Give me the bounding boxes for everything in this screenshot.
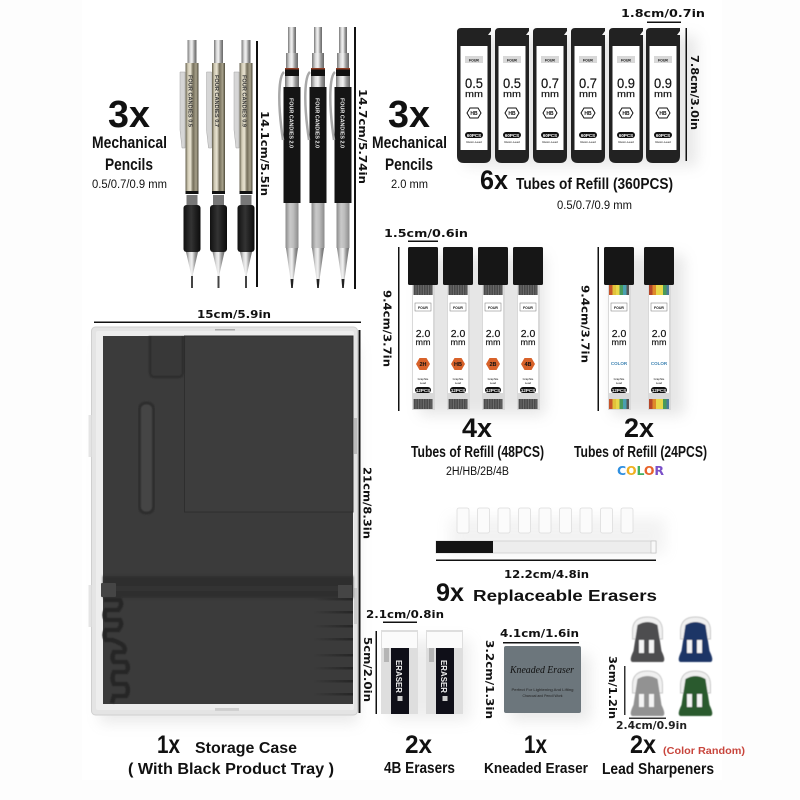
tube 2H: 2H <box>419 362 427 368</box>
sharpener navy <box>679 617 712 662</box>
tube 4B <box>513 247 543 410</box>
pencil 2: FOUR CANDIES 2.0 <box>314 98 320 148</box>
heading: 3x mechanical pencils 2.0 <box>372 94 447 191</box>
tube 4B: Lead <box>525 381 532 385</box>
tube 4B: FOUR <box>523 306 533 310</box>
pencil 2: FOUR CANDIES 0.7 <box>213 75 219 127</box>
colour tube 1: Lead <box>616 381 623 385</box>
dimension: kneaded eraser width: 4.1cm/1.6in <box>500 627 579 640</box>
heading: 2x tubes of refill colour: Tubes of Refill (24PCS) <box>574 444 707 461</box>
color random note: (Color Random) <box>663 745 745 757</box>
tube 0.9 <box>609 28 643 163</box>
heading: 3x mechanical pencils 2.0: 3x <box>388 94 430 136</box>
sharpener dark grey <box>631 617 664 662</box>
dimension: sharpener height <box>606 656 626 719</box>
tube 4B: mm <box>520 338 536 347</box>
heading: 6x tubes of refill <box>480 165 673 212</box>
tube 0.9: 60PCS <box>619 133 633 138</box>
tray recess square <box>150 336 183 377</box>
heading: replaceable erasers: Replaceable Erasers <box>473 588 657 605</box>
tube 0.7: FOUR <box>545 58 555 62</box>
heading: 4B erasers <box>384 731 455 777</box>
tube 2B: FOUR <box>488 306 498 310</box>
pencil 1: FOUR CANDIES 2.0 <box>288 98 294 148</box>
tube 4B: 12PCS <box>521 388 535 393</box>
tube HB: Graphite <box>453 377 464 381</box>
eraser holder tube <box>436 541 656 553</box>
tube 0.7 second: HB <box>584 111 592 117</box>
pencil 3 <box>234 40 254 288</box>
tube 2H: Lead <box>420 381 427 385</box>
heading: lead sharpeners <box>602 731 745 778</box>
tube 0.5 <box>457 28 491 163</box>
tray recess large <box>184 336 353 512</box>
tube 0.9: HB <box>622 111 630 117</box>
refill tubes: two colour tubes <box>604 247 684 415</box>
white eraser refills <box>457 508 633 533</box>
tube 2H: Graphite <box>418 377 429 381</box>
dimension: case height: 21cm/8.3in <box>360 467 374 539</box>
tube 2B: 2B <box>489 362 497 368</box>
pencil 3 <box>330 27 352 288</box>
tube 0.5 second: 0.5 <box>503 76 521 91</box>
tube 0.5: 0.5 <box>465 76 483 91</box>
gold mechanical pencils <box>180 40 254 288</box>
stripes top <box>609 285 629 295</box>
tube 2B: Graphite <box>488 377 499 381</box>
tube 0.7 second: mm <box>579 89 597 99</box>
heading: storage case: 1x <box>157 731 180 759</box>
wave grooves left <box>104 600 128 703</box>
tube 0.7 second <box>571 28 605 163</box>
kneaded eraser card: Charcoal and Pencil Work <box>522 694 563 698</box>
dimension: sharpener height: 3cm/1.2in <box>606 656 619 719</box>
colour tube 1: 2.0 <box>612 328 626 340</box>
tube 0.9 second: Resin-Lead <box>655 140 671 144</box>
heading: 4x tubes of refill: Tubes of Refill (48PCS) <box>411 444 544 461</box>
tube 0.7 <box>533 28 567 163</box>
refill tubes: six black tubes <box>457 28 697 166</box>
tube 2B: mm <box>486 338 501 347</box>
colour tube 2 <box>644 247 674 410</box>
heading: 4B erasers: 4B Erasers <box>384 760 455 777</box>
tube 0.7 second: 60PCS <box>581 133 595 138</box>
colour tube 2: 2.0 <box>652 328 666 340</box>
heading: 4x tubes of refill <box>411 413 544 478</box>
tube 0.9: FOUR <box>621 58 631 62</box>
tube 0.5: mm <box>465 89 483 99</box>
4B erasers <box>381 630 470 720</box>
tube 0.5 second: Resin-Lead <box>504 140 520 144</box>
colour tube 2: mm <box>652 338 667 347</box>
stripes bottom <box>609 399 629 409</box>
tube 2H: 2.0 <box>416 328 430 340</box>
heading: 4x tubes of refill: 2H/HB/2B/4B <box>446 466 509 478</box>
heading: 3x mechanical pencils 2.0: Mechanical <box>372 133 447 152</box>
heading: 4B erasers: 2x <box>405 731 432 759</box>
heading: 2x tubes of refill colour <box>574 413 707 478</box>
heading: 6x tubes of refill: Tubes of Refill (360PCS) <box>516 176 673 193</box>
colour tube 1: Graphite <box>614 377 625 381</box>
tube HB: HB <box>454 362 462 368</box>
pencil 3: FOUR CANDIES 0.9 <box>240 75 246 127</box>
heading: kneaded eraser: 1x <box>524 731 547 759</box>
tube HB: mm <box>450 338 466 347</box>
tube HB: 2.0 <box>451 328 465 340</box>
kneaded eraser card: Perfect For Lightening And Lifting <box>512 688 574 692</box>
tube 0.9: mm <box>617 89 635 99</box>
refill tubes: four graphite tubes <box>408 247 545 415</box>
kneaded eraser card <box>504 646 590 721</box>
sharpener green <box>679 671 712 716</box>
heading: lead sharpeners: 2x <box>630 731 656 759</box>
tube 0.9 second: HB <box>659 111 667 117</box>
tube 2H: FOUR <box>418 306 428 310</box>
grooves right <box>313 598 353 696</box>
tube 0.9 second: FOUR <box>658 58 668 62</box>
heading: storage case: Storage Case <box>195 740 297 757</box>
heading: replaceable erasers <box>436 579 657 607</box>
tube HB: Lead <box>455 381 462 385</box>
heading: storage case <box>128 731 334 778</box>
tube 2B <box>478 247 508 410</box>
stripes top <box>649 285 669 295</box>
dimension: black pencil length: 14.7cm/5.74in <box>356 89 369 184</box>
heading: 6x tubes of refill: 0.5/0.7/0.9 mm <box>557 200 632 212</box>
tube 0.9 second <box>646 28 680 163</box>
tube 0.9: 0.9 <box>617 76 635 91</box>
dimension: refill tube height <box>686 28 701 161</box>
COLOR label: COLOR <box>617 463 664 478</box>
sharpener grey <box>631 671 664 716</box>
tray slot <box>140 403 154 513</box>
heading: 4x tubes of refill: 4x <box>462 413 492 443</box>
tube 0.5: FOUR <box>469 58 479 62</box>
tube 0.5: 60PCS <box>467 133 481 138</box>
tube HB <box>443 247 473 410</box>
heading: lead sharpeners: Lead Sharpeners <box>602 761 714 778</box>
colour tube 1: 12PCS <box>612 388 626 393</box>
tube 4B: Graphite <box>523 377 534 381</box>
colour tube 1: mm <box>612 338 627 347</box>
eraser 2: ERASER <box>439 660 449 693</box>
heading: 2x tubes of refill colour: 2x <box>624 413 654 443</box>
clear case frame <box>92 327 358 715</box>
tube 2H: mm <box>416 338 431 347</box>
eraser 1: ERASER <box>394 660 404 693</box>
dimension: colour tube height: 9.4cm/3.7in <box>578 285 592 363</box>
tube HB: 12PCS <box>451 388 465 393</box>
tube 0.5 second: HB <box>508 111 516 117</box>
tube 0.7: 60PCS <box>543 133 557 138</box>
tube 0.7: HB <box>546 111 554 117</box>
dimension: refill tube width: 1.8cm/0.7in <box>621 7 705 20</box>
tube HB: FOUR <box>453 306 463 310</box>
colour tube 1: FOUR <box>614 306 624 310</box>
heading: 3x mechanical pencils 0.5/0.7/0.9: Mechanical <box>92 133 167 152</box>
dimension: 2.0 tube height: 9.4cm/3.7in <box>380 290 394 367</box>
tube 2B: 2.0 <box>486 328 500 340</box>
replaceable erasers and tube <box>436 508 665 554</box>
heading: 3x mechanical pencils 0.5/0.7/0.9: 0.5/0.7/0.9 mm <box>92 179 167 191</box>
heading: replaceable erasers: 9x <box>436 579 464 607</box>
dimension: 2.0 tube width: 1.5cm/0.6in <box>384 227 468 240</box>
heading: 3x mechanical pencils 2.0: Pencils <box>385 155 433 174</box>
tube 4B: 4B <box>524 362 532 368</box>
pencil 3: FOUR CANDIES 2.0 <box>338 98 344 148</box>
dimension: gold pencil length: 14.1cm/5.5in <box>258 111 271 196</box>
black mechanical pencils <box>279 27 352 288</box>
tube 0.9: Resin-Lead <box>618 140 634 144</box>
pencil 1: FOUR CANDIES 0.5 <box>186 75 192 127</box>
pencil 2 <box>206 40 227 288</box>
heading: 3x mechanical pencils 0.5/0.7/0.9: Pencils <box>105 155 153 174</box>
heading: storage case: ( With Black Product Tray ) <box>128 761 334 778</box>
tube 0.5 second <box>495 28 529 163</box>
lead sharpeners <box>631 617 712 716</box>
pencil 1 <box>180 40 200 288</box>
heading: 6x tubes of refill: 6x <box>480 165 508 195</box>
colour tube 2: Graphite <box>654 377 665 381</box>
tube 2B: 12PCS <box>486 388 500 393</box>
pen rail <box>101 576 353 598</box>
dimension: eraser height <box>361 631 377 714</box>
dimension: kneaded eraser height: 3.2cm/1.3in <box>483 640 496 719</box>
tube 0.5 second: FOUR <box>507 58 517 62</box>
tube 2H <box>408 247 438 410</box>
tube 0.7 second: Resin-Lead <box>580 140 596 144</box>
tube 0.5 second: 60PCS <box>505 133 519 138</box>
dimension: case width: 15cm/5.9in <box>197 308 271 321</box>
dimension: refill tube height: 7.8cm/3.0in <box>688 55 701 130</box>
dimension: eraser width: 2.1cm/0.8in <box>366 608 444 621</box>
tube 0.9 second: 60PCS <box>656 133 670 138</box>
black tray <box>103 336 353 704</box>
stripes bottom <box>649 399 669 409</box>
tube 0.7 second: 0.7 <box>579 76 597 91</box>
tube 0.5: HB <box>470 111 478 117</box>
dimension: eraser height: 5cm/2.0in <box>361 637 374 702</box>
tube 0.7: Resin-Lead <box>542 140 558 144</box>
kneaded eraser card: Kneaded Eraser <box>509 664 575 676</box>
tube 0.9 second: 0.9 <box>654 76 672 91</box>
tube 0.7: 0.7 <box>541 76 559 91</box>
pencil 1 <box>279 27 300 288</box>
colour tube 2: 12PCS <box>652 388 666 393</box>
colour tube 2: COLOR <box>651 361 668 366</box>
dimension: sharpener width: 2.4cm/0.9in <box>616 719 687 732</box>
tube 0.9 second: mm <box>654 89 672 99</box>
pencil 2 <box>305 27 326 288</box>
colour tube 1: COLOR <box>611 361 628 366</box>
tube 0.5: Resin-Lead <box>466 140 482 144</box>
tube 0.7 second: FOUR <box>583 58 593 62</box>
tube 0.5 second: mm <box>503 89 521 99</box>
heading: kneaded eraser <box>484 731 588 777</box>
heading: 3x mechanical pencils 0.5/0.7/0.9 <box>92 94 167 191</box>
heading: 3x mechanical pencils 0.5/0.7/0.9: 3x <box>108 94 150 136</box>
colour tube 1 <box>604 247 634 410</box>
colour tube 2: Lead <box>656 381 663 385</box>
storage case <box>88 327 358 723</box>
heading: kneaded eraser: Kneaded Eraser <box>484 760 588 777</box>
tube 0.7: mm <box>541 89 559 99</box>
heading: 3x mechanical pencils 2.0: 2.0 mm <box>391 179 428 191</box>
colour tube 2: FOUR <box>654 306 664 310</box>
tube 2H: 12PCS <box>416 388 430 393</box>
dimension: tube length: 12.2cm/4.8in <box>504 568 589 581</box>
tube 2B: Lead <box>490 381 497 385</box>
tube 4B: 2.0 <box>521 328 535 340</box>
